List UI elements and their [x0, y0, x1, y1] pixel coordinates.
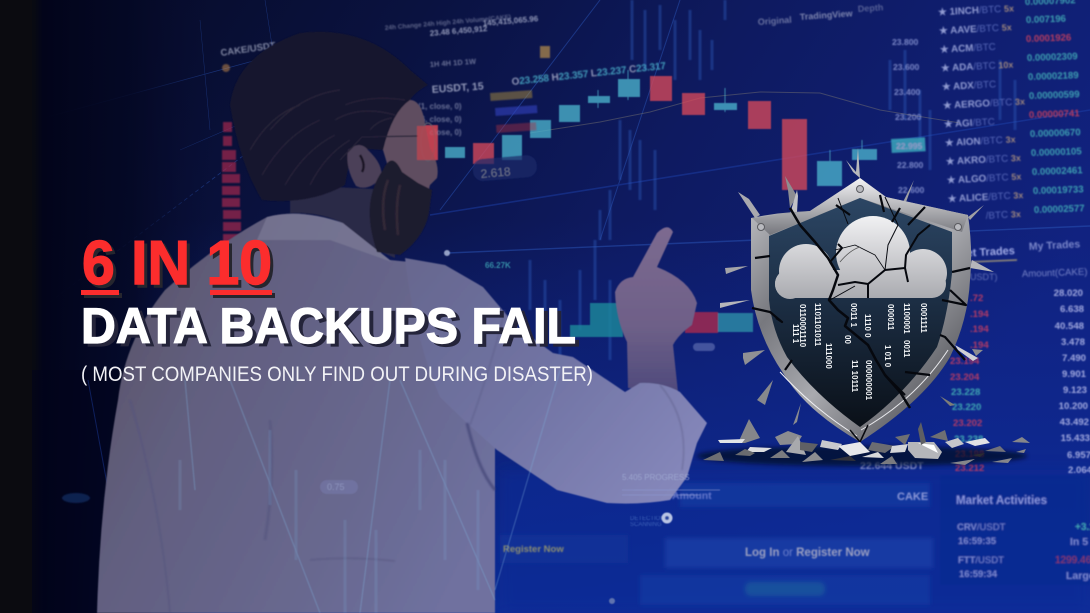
binary data rain: 0011 1	[849, 303, 858, 328]
binary data rain: 0001111	[919, 303, 928, 333]
trade panel: 23.194	[950, 356, 980, 367]
infographic scene: 0.0001926	[1026, 32, 1071, 45]
market list: pairs and prices: ★ AAVE/BTC 5x	[939, 22, 1012, 37]
left dark vignette	[0, 0, 215, 613]
trade panel: .194	[970, 340, 989, 351]
beard edge texture	[383, 180, 400, 235]
market activities panel: Market Activities	[956, 495, 1047, 507]
price axis: 23.400	[894, 87, 921, 97]
neck	[290, 185, 395, 258]
shield outer frame	[751, 178, 971, 442]
trade panel: 43.492	[1060, 417, 1089, 428]
shield cracks	[752, 195, 970, 442]
fibonacci tags	[472, 154, 538, 182]
order form labels: Log In or Register Now	[745, 547, 870, 559]
price axis: 22.600	[898, 185, 925, 195]
chart header readouts: TradingView	[799, 8, 854, 22]
binary data rain: 11 10111	[850, 360, 859, 393]
market list: pairs and prices: ★ AGI/BTC	[944, 117, 995, 130]
chart header readouts: (1, close, 0)	[418, 102, 462, 111]
price axis: 23.600	[893, 62, 920, 72]
chart header readouts: O23.258 H23.357 L23.237 C23.317	[511, 61, 667, 88]
market list: pairs and prices: ★ AION/BTC 3x	[945, 134, 1016, 149]
order form labels	[503, 460, 928, 559]
market list: pairs and prices: ★ ADA/BTC 10x	[941, 60, 1014, 74]
cracked cloud backup shield	[697, 148, 1030, 466]
binary data rain: 000000001	[864, 360, 873, 401]
market list: pairs and prices: /BTC 3x	[986, 209, 1021, 222]
infographic scene: 0.00002461	[1032, 165, 1083, 178]
market activities panel: 16:59:34	[959, 569, 998, 580]
market list: pairs and prices	[938, 3, 1031, 224]
sleeve	[405, 258, 707, 504]
infographic scene: 0.007196	[1026, 14, 1066, 26]
market activities panel: CRV/USDT	[957, 522, 1006, 533]
market activities panel: FTT/USDT	[958, 555, 1004, 566]
overlay HUD labels on the shirt: DETECTION	[630, 516, 665, 522]
chart header readouts: (6, close, 0)	[418, 115, 462, 124]
left symbol list: CAKE/USDT	[220, 40, 276, 59]
left symbol list	[220, 40, 276, 243]
infographic scene: 0.00000741	[1029, 108, 1080, 121]
headline: data backups fail: DATA BACKUPS FAIL	[85, 301, 580, 357]
subheading: ( MOST COMPANIES ONLY FIND OUT DURING DISASTER)	[81, 363, 593, 386]
headline: 6 in 10: 6 IN 10	[85, 232, 275, 301]
trade panel: 23.212	[955, 463, 984, 474]
trade panel: Amount(CAKE)	[1022, 267, 1088, 280]
hair	[230, 32, 428, 201]
market activities panel	[940, 475, 1090, 585]
market list: pairs and prices: ★ ACM/BTC	[940, 42, 996, 56]
binary data rain: 0011	[902, 340, 911, 358]
trade panel	[941, 238, 1090, 476]
trade panel: 23.238	[954, 434, 984, 445]
market list: pairs and prices: ★ ALICE/BTC 3x	[948, 190, 1024, 205]
chart header readouts: 24h Change 24h High 24h Volume(CAKE)	[385, 14, 511, 32]
rubble at the base	[703, 419, 1030, 465]
infographic scene: 0.00000670	[1030, 127, 1081, 140]
price axis: 22.800	[897, 160, 924, 170]
hair texture	[250, 90, 405, 185]
market activities panel: In 5	[1070, 536, 1088, 548]
binary data rain: 1 01 0	[883, 345, 892, 368]
binary data rain: 00	[843, 335, 852, 344]
binary data rain: 000011	[886, 304, 895, 331]
chart header readouts	[385, 2, 884, 137]
binary data rain: 1101101011	[813, 303, 822, 347]
infographic scene: 0.00000105	[1031, 146, 1082, 159]
trade panel: .194	[970, 309, 989, 320]
infographic scene: 0.00002577	[1034, 203, 1085, 216]
price axis: 23.200	[895, 112, 922, 122]
overlay HUD labels on the shirt	[320, 250, 720, 604]
trade panel: 10.200	[1059, 401, 1088, 412]
infographic scene: 0.00002309	[1027, 51, 1078, 64]
chart header readouts: 1H 4H 1D 1W	[430, 57, 477, 69]
infographic scene: 0.00002189	[1028, 70, 1079, 83]
shirt reflected chart lines	[180, 370, 560, 613]
collar	[257, 214, 392, 262]
moving average line	[530, 92, 960, 133]
market list: pairs and prices: ★ ALGO/BTC 5x	[947, 172, 1022, 186]
price axis: 23.800	[892, 37, 919, 47]
binary data rain: 0110001110	[798, 304, 807, 348]
order form labels: 22.644 USDT	[860, 460, 924, 472]
beard	[370, 160, 432, 255]
market activities panel: 16:59:35	[958, 536, 997, 547]
trade panel: 15.433	[1061, 433, 1090, 444]
price axis: 22.995	[896, 141, 923, 151]
ear	[347, 145, 381, 188]
candlestick chart	[417, 70, 877, 190]
glasses	[340, 123, 435, 161]
shield inner panel	[769, 198, 952, 427]
trade panel: 23.204	[950, 372, 980, 383]
chart header readouts: EUSDT, 15	[431, 80, 484, 96]
overlay HUD labels on the shirt: SCANNING	[630, 522, 662, 528]
lower chart blocks behind the hand	[485, 261, 753, 351]
binary data rain: 111 1	[791, 324, 800, 344]
trade panel: 7.490	[1062, 353, 1086, 364]
headline: data backups fail: DATA BACKUPS FAIL	[81, 298, 576, 354]
fibonacci tags: 2.618	[480, 164, 512, 181]
binary data rain	[791, 303, 928, 401]
trade panel: 3.478	[1061, 337, 1086, 348]
overlay HUD labels on the shirt: 5.405 PROGRESS	[622, 473, 690, 482]
chart header readouts: Depth	[857, 2, 884, 14]
trade panel: 23.220	[952, 402, 981, 413]
trade panel: .194	[970, 324, 989, 335]
headline block	[81, 229, 593, 386]
market list: pairs and prices: ★ AKRO/BTC 3x	[946, 153, 1021, 168]
lower chart blocks behind the hand: 66.27K	[485, 261, 511, 270]
market list: pairs and prices: ★ ADX/BTC	[942, 79, 996, 93]
trade panel: 23.202	[953, 418, 982, 429]
order form bands	[500, 483, 933, 605]
trade panel: .72	[970, 293, 983, 304]
binary data rain: 1100001	[902, 303, 911, 334]
face	[383, 100, 438, 205]
trade panel: 23.198	[955, 449, 985, 460]
order form labels: Register Now	[503, 544, 564, 555]
order form labels: Amount	[672, 490, 712, 502]
rivets	[758, 186, 962, 230]
trade panel: 9.901	[1062, 369, 1087, 380]
person: man pointing at the screen	[97, 32, 707, 613]
shirt folds	[130, 310, 684, 613]
chart grid and trend lines	[0, 0, 1090, 340]
trade panel: 23.228	[951, 387, 981, 398]
chart header readouts: (9, close, 0)	[418, 128, 462, 137]
cloud	[775, 216, 947, 299]
trade panel: 40.548	[1055, 321, 1085, 332]
market list: pairs and prices: ★ AERGO/BTC 3x	[943, 96, 1025, 112]
ground shadow	[697, 446, 1027, 466]
order form labels: CAKE	[897, 491, 928, 503]
background mini candle bars	[530, 0, 1015, 360]
binary data rain: 1110 0	[863, 314, 872, 338]
overlay HUD labels on the shirt: 0.75	[327, 482, 345, 492]
binary data rain: 111000	[824, 343, 833, 369]
infographic scene: 0.00019733	[1033, 184, 1084, 197]
trade panel: 28.020	[1054, 288, 1083, 299]
chart header readouts: Original	[757, 15, 792, 27]
trade panel: 6.638	[1060, 304, 1085, 315]
headline: 6 in 10: 6 IN 10	[82, 229, 272, 298]
chart header readouts: 23.48 6,450,912	[429, 24, 488, 38]
red candle seen through glasses	[417, 126, 437, 160]
flying shards	[720, 148, 994, 425]
price axis	[891, 37, 926, 195]
torso of the shirt	[97, 214, 495, 613]
infographic scene: 0.00000599	[1029, 89, 1080, 102]
market list: pairs and prices: ★ 1INCH/BTC 5x	[938, 3, 1014, 18]
hand and forearm	[615, 227, 697, 392]
trade panel: 9.123	[1063, 385, 1087, 396]
trade panel: USDT)	[970, 272, 998, 282]
trade panel: My Trades	[1029, 238, 1081, 253]
chart header readouts: 145,415,065.96	[482, 14, 539, 28]
trade panel: Market Trades	[941, 245, 1015, 261]
